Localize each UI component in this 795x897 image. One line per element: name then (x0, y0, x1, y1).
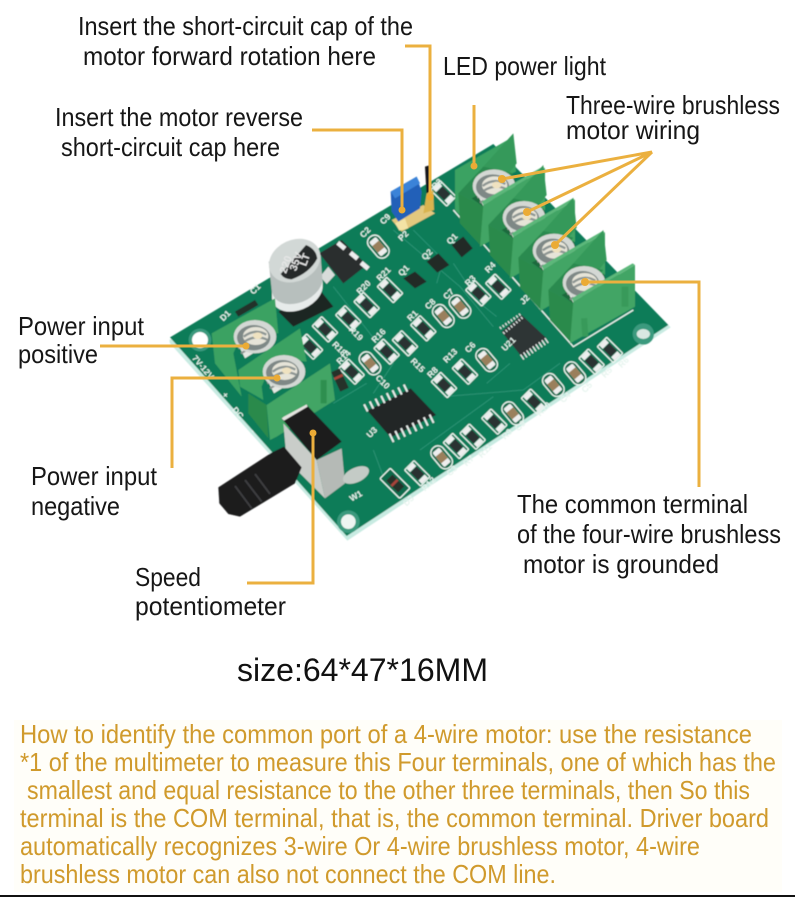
label: reverse cap: short-circuit cap here (61, 132, 280, 162)
silkscreen labels: DC (230, 405, 246, 421)
silkscreen labels: C8 (423, 296, 438, 311)
silkscreen labels: U3 (364, 425, 379, 440)
silkscreen labels: C1 (248, 281, 263, 296)
label: power input positive: positive (18, 339, 98, 369)
silkscreen labels: C7 (441, 286, 456, 301)
silkscreen labels: R11 (476, 442, 494, 460)
leader end dots (242, 162, 589, 436)
silkscreen labels: C2 (358, 225, 373, 240)
diode D2 (331, 368, 349, 392)
silkscreen labels: R10 (534, 400, 553, 418)
silkscreen labels: R4 (483, 260, 498, 275)
silkscreen labels: J2 (518, 292, 532, 306)
label: reverse cap (55, 102, 303, 162)
right terminal block, back plate (455, 137, 516, 237)
note paragraph (20, 719, 776, 889)
silkscreen labels: W1 (348, 488, 364, 503)
silkscreen labels: R14 (334, 348, 353, 366)
transistors Q1 Q2 Q3 (403, 237, 473, 288)
silkscreen labels: R7 (461, 453, 476, 468)
silkscreen labels: C10 (374, 373, 392, 391)
silkscreen labels: R18 (330, 339, 349, 358)
board surface (170, 144, 668, 536)
silkscreen labels: - (248, 427, 258, 435)
label: three-wire wiring (566, 90, 780, 145)
right terminal 3 (518, 198, 605, 311)
silkscreen labels: Q1 (444, 231, 460, 246)
label: power input positive (18, 311, 145, 369)
label: common terminal: motor is grounded (523, 549, 719, 579)
electrolytic capacitor (262, 231, 333, 327)
diode D1 (235, 300, 258, 317)
label: forward rotation cap: Insert the short-circuit cap of the (78, 11, 413, 41)
silkscreen labels: C3 (444, 463, 459, 478)
silkscreen labels: C5 (579, 380, 594, 395)
terminal outline silkscreen (453, 210, 633, 347)
bottom border (0, 895, 795, 897)
silkscreen labels: R1 (405, 308, 420, 323)
potentiometer (218, 404, 372, 517)
silkscreen labels: R2 (429, 176, 444, 191)
silkscreen labels: R9 (499, 426, 514, 441)
silkscreen labels: C9 (513, 418, 528, 433)
silkscreen labels: Q2 (419, 247, 435, 262)
jumper header with blue cap (391, 165, 435, 232)
note paragraph: brushless motor can also not connect the COM line. (20, 859, 556, 889)
silkscreen labels: R16 (369, 326, 388, 345)
right terminal 2 (488, 165, 575, 278)
leader: power positive (100, 344, 246, 348)
leader: forward cap (405, 46, 430, 197)
board edge (169, 146, 671, 541)
leader: power negative (172, 378, 277, 468)
silkscreen labels: R3 (463, 273, 478, 288)
silkscreen labels: C6 (463, 340, 478, 355)
IC U3 (365, 386, 436, 438)
silkscreen labels: R12 (419, 475, 438, 493)
left terminal 1 (212, 298, 278, 397)
label: speed potentiometer (135, 562, 286, 621)
electrolytic capacitor: 35V (288, 250, 306, 273)
silkscreen labels: P2 (396, 228, 411, 243)
label: speed potentiometer: Speed (135, 562, 201, 592)
silkscreen labels: R15 (409, 356, 427, 374)
silkscreen labels: R21 (374, 265, 393, 283)
photo: motor driver circuit board (169, 133, 671, 541)
silkscreen labels: D1 (218, 308, 233, 323)
label: power input negative (31, 461, 158, 521)
leader: common terminal (585, 282, 699, 487)
electrolytic capacitor: LT (298, 252, 313, 268)
diode D3 (380, 468, 410, 498)
label: LED power light: LED power light (443, 51, 607, 81)
silkscreen labels: R13 (441, 346, 459, 365)
leader: reverse cap (312, 130, 402, 210)
right terminal 4 (548, 230, 635, 343)
silkscreen labels: R19 (347, 324, 365, 343)
mounting holes (189, 323, 654, 533)
silkscreen labels: R20 (354, 278, 373, 296)
label: common terminal (517, 489, 781, 579)
regulator chip (319, 240, 370, 284)
leader: LED power light (472, 105, 476, 166)
silkscreen labels: R5 (599, 365, 614, 380)
silkscreen labels: + (220, 390, 231, 400)
note paragraph: automatically recognizes 3-wire Or 4-wire brushless motor, 4-wire (20, 831, 700, 861)
IC U21 (500, 313, 548, 357)
left terminal 2 (238, 328, 335, 440)
silkscreen labels: R8 (425, 365, 440, 380)
silkscreen labels: C9 (378, 211, 393, 226)
silkscreen labels: 7V-12V (190, 353, 216, 382)
size heading: size:64*47*16MM (237, 652, 488, 688)
silkscreen labels: U21 (499, 335, 518, 353)
label: power input negative: negative (31, 491, 120, 521)
silkscreen labels: D3 (401, 493, 416, 508)
copper traces (333, 230, 560, 477)
leader: three-wire motor wiring (502, 152, 652, 245)
label: reverse cap: Insert the motor reverse (55, 102, 303, 132)
leader: speed potentiometer (247, 433, 313, 583)
paragraph cream halo (14, 720, 782, 892)
label: forward rotation cap: motor forward rotation here (83, 41, 376, 71)
ceramic capacitors (356, 232, 588, 472)
right terminal 1 (458, 133, 545, 247)
silkscreen labels: C4 (558, 390, 573, 405)
label: power input positive: Power input (18, 311, 145, 341)
label: forward rotation cap (78, 11, 413, 71)
label: common terminal: The common terminal (517, 489, 748, 519)
label: speed potentiometer: potentiometer (135, 591, 286, 621)
electrolytic capacitor: 220 (278, 254, 295, 275)
silkscreen labels: Q1 (396, 263, 411, 278)
label: power input negative: Power input (31, 461, 158, 491)
silkscreen labels (190, 176, 631, 508)
label: three-wire wiring: motor wiring (566, 115, 700, 145)
silkscreen labels: R6 (616, 355, 631, 370)
resistors (297, 181, 623, 486)
